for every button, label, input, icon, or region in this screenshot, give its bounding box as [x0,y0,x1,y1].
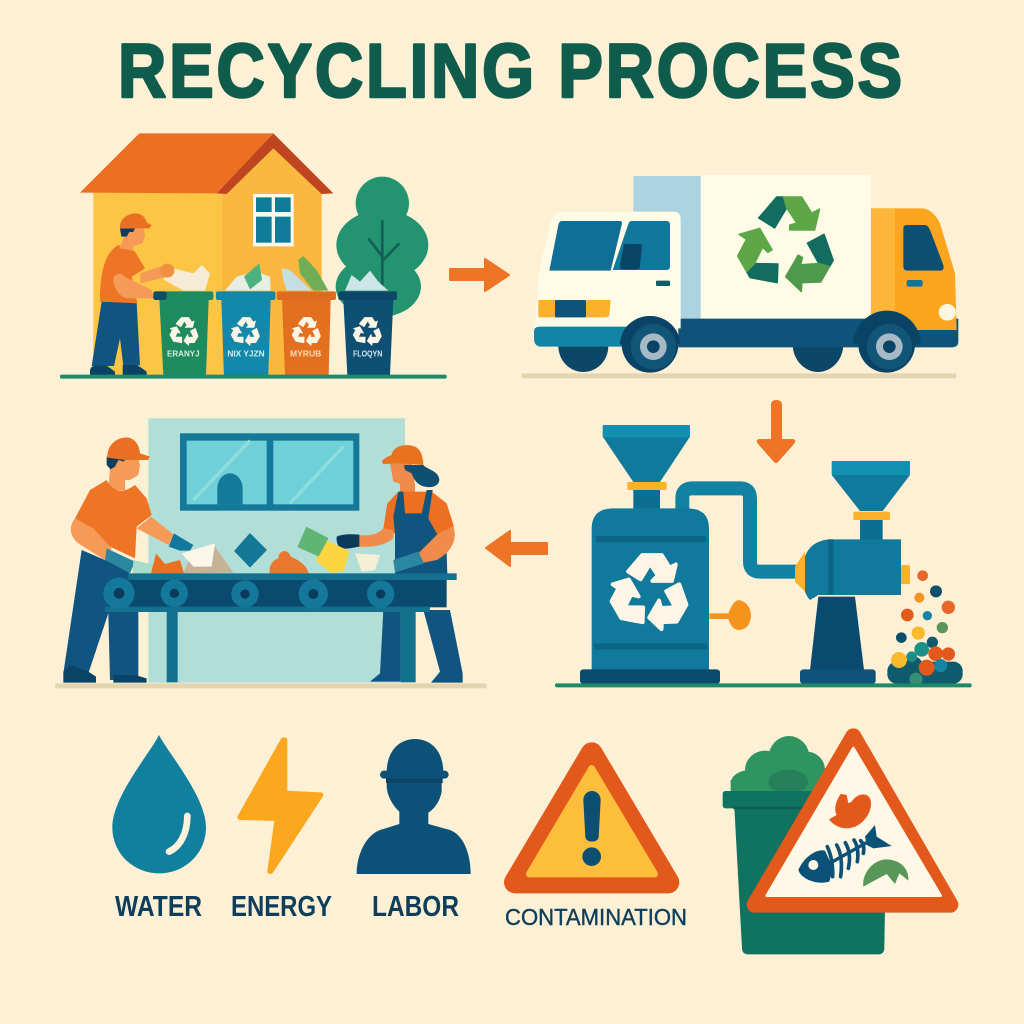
food scrap green [863,859,908,887]
wall [148,418,405,683]
ground shadow [522,373,957,378]
resource icons row [112,735,471,874]
orange cab section [871,208,957,330]
panel: sorting line [55,418,487,688]
rear dark wheels [558,344,843,372]
panel: processing machinery [555,425,972,687]
arrow: processing to sorting [486,531,547,566]
valve knob [709,600,751,630]
label: labor: LABOR [372,891,459,923]
ground shadow [55,683,487,688]
label: energy: ENERGY [231,891,332,923]
pipe [682,488,797,572]
conveyor belt [103,573,457,682]
facility window [180,433,359,511]
ground line [555,683,972,687]
bin: orange [277,291,336,375]
warning triangle [755,736,950,905]
bin: blue [216,291,275,375]
green waste mound [731,736,825,797]
panel: collection truck [522,175,958,378]
white cab [535,212,681,328]
food scrap orange [829,794,871,828]
arrow: house to truck [450,259,509,291]
bin: green: ERANYJ [167,348,200,358]
worker placing recycling [90,213,174,375]
bin: blue: NIX YJZN [227,348,265,358]
label: contamination: CONTAMINATION [505,904,687,930]
materials on belt [133,528,380,573]
icon: lightning bolt [240,740,321,871]
contaminated bin with warning [723,736,950,954]
icon: water drop [112,735,206,873]
bin: orange: MYRUB [290,348,321,358]
worker left [63,437,193,683]
chassis [678,319,958,347]
fish bones [798,825,892,883]
recycling symbol on tank [605,555,694,634]
plastic pellets [887,570,963,686]
bin: green [153,291,213,375]
recycling symbol on truck [729,197,842,298]
worker right [337,445,463,683]
tank machine [580,425,751,684]
panel: household sorting into bins [60,133,447,379]
warning sign: contamination [515,753,668,882]
label: water: WATER [115,891,202,923]
front wheel [620,316,680,373]
bin: navy [338,291,397,375]
grinder machine [795,461,910,684]
recycling contents [163,256,388,291]
ground line [60,375,447,379]
arrow: truck to processing [757,400,795,463]
house [80,133,333,375]
front bumper [534,327,632,347]
truck cargo box [633,175,871,319]
tree [336,177,428,317]
bin: navy: FLOQYN [353,348,382,358]
icon: worker silhouette [357,739,471,874]
rear wheel [853,311,921,373]
bin body [723,791,887,954]
title: RECYCLING PROCESS [118,29,902,114]
